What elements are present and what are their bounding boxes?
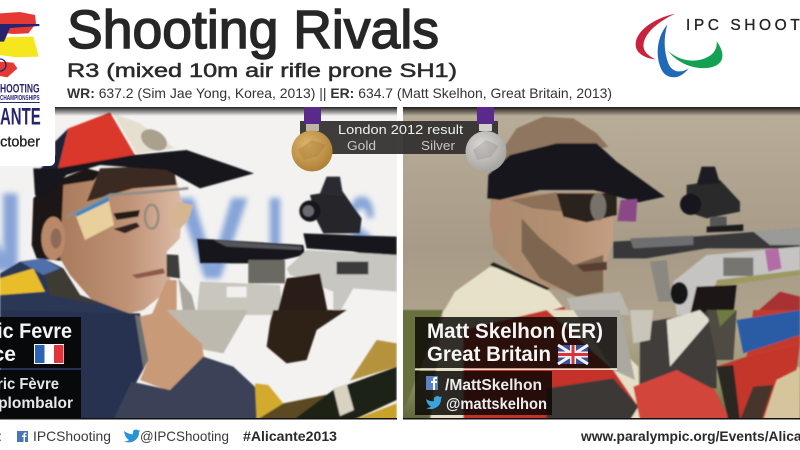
hand: [140, 310, 205, 390]
facebook handle: /MattSkelhon: [445, 377, 542, 394]
left photo: Cédric Fevre aiming rifle: [0, 107, 397, 420]
flag: France: [34, 344, 64, 364]
red sleeve and blue strap: [717, 310, 800, 420]
shaved head: [504, 116, 608, 162]
jacket sleeve: [0, 310, 148, 420]
flag: Great Britain: [558, 345, 588, 364]
footer social links: [0, 428, 337, 444]
gray rifle stock: [165, 310, 248, 353]
twitter handle: @mattskelhon: [446, 396, 547, 413]
black visor: [487, 143, 665, 202]
icon: twitter: [124, 430, 140, 442]
shooter hair and ear: [32, 165, 183, 315]
facebook page: IPCShooting: [33, 428, 111, 444]
subtitle: R3 (mixed 10m air rifle prone SH1): [67, 61, 457, 82]
IPC Shooting logo: [636, 14, 800, 77]
blurred sponsor lettering: I: [265, 172, 285, 303]
left athlete name panel: [0, 317, 81, 368]
right athlete name panel: [415, 317, 617, 368]
gold label: Gold: [347, 139, 376, 153]
white logo box top left: [0, 0, 55, 166]
rifle silhouette: [0, 24, 39, 42]
jacket shoulder: [0, 258, 133, 315]
yellow flag stroke: [0, 37, 39, 57]
trousers and sling: [255, 340, 397, 420]
rifle with scope: [152, 177, 397, 315]
gold medal: [292, 107, 332, 172]
championships logo: [0, 12, 41, 150]
logo wording: CHAMPIONSHIPS: [0, 95, 40, 102]
face: [489, 192, 617, 297]
rifle grip: [267, 310, 347, 363]
left athlete social panel: [0, 370, 81, 418]
left photo: Cédric Fevre aiming rifle: S: [347, 172, 377, 303]
icon: facebook: [426, 376, 438, 390]
logo wording: ANTE: [0, 103, 41, 130]
rifle with scope: [567, 167, 800, 315]
hashtag: #Alicante2013: [243, 428, 337, 444]
result heading: London 2012 result: [338, 123, 464, 137]
athlete name: Matt Skelhon (ER): [427, 320, 603, 343]
country: Great Britain: [427, 343, 551, 366]
target ring: [0, 59, 6, 71]
lower red stroke: [0, 62, 17, 77]
right photo: Matt Skelhon aiming rifle: [400, 107, 800, 420]
right athlete social panel: [415, 371, 552, 415]
right panel divider: [415, 368, 617, 370]
logo wording: [0, 81, 41, 130]
silver medal: [466, 107, 506, 172]
icon: twitter: [426, 396, 442, 409]
blurred sponsor lettering: [0, 190, 378, 282]
blurred sponsor lettering: V: [177, 172, 248, 303]
white and red jacket: [430, 310, 640, 420]
green floor background: [403, 309, 444, 409]
London 2012 result panel: [300, 121, 498, 154]
title: Shooting Rivals: [67, 0, 439, 60]
icon: facebook: [17, 431, 28, 442]
logo wording: HOOTING: [0, 81, 40, 95]
shooting glove and cuff: [630, 310, 737, 420]
jacket collar: [442, 262, 570, 315]
lower sleeve: [113, 357, 258, 420]
twitter handle: @IPCShooting: [140, 428, 229, 444]
agitos symbol: [636, 14, 722, 77]
shooting glasses and blinders: [67, 188, 193, 240]
silver label: Silver: [421, 139, 455, 153]
shooter cap: [33, 112, 254, 198]
world and european records: WR: 637.2 (Sim Jae Yong, Korea, 2013) || ER: 634.7 (Matt Skelhon, Great Britain, 2013): [67, 85, 612, 101]
sight and blinder: [590, 193, 637, 222]
top and bottom photo edges: [0, 107, 800, 420]
red flag stroke: [0, 12, 36, 34]
